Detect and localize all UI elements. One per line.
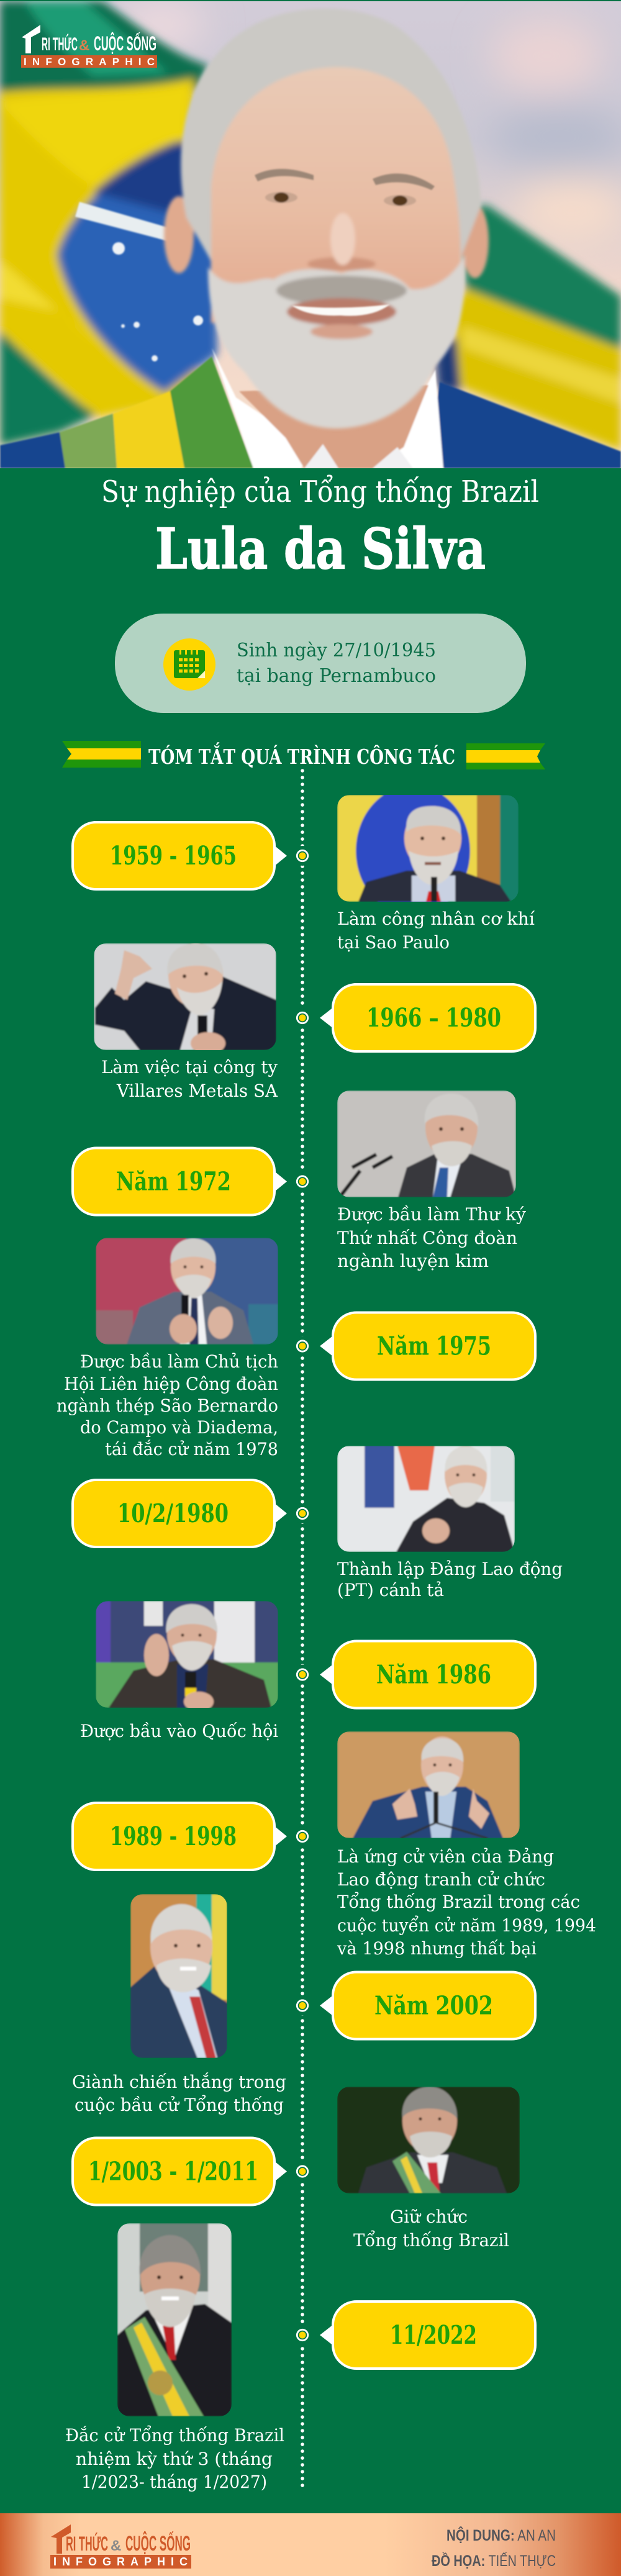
- item 1989-1998: date pill: 1989 - 1998: [110, 1821, 237, 1851]
- caption 10: Đắc cử Tổng thống Brazil: [65, 2425, 284, 2446]
- caption 7: Lao động tranh cử chức: [337, 1869, 545, 1890]
- caption 8: [72, 2072, 286, 2115]
- caption 1: tại Sao Paulo: [337, 932, 450, 953]
- caption 3: Thứ nhất Công đoàn: [337, 1228, 517, 1248]
- credits: ĐỒ HỌA: TIẾN THỰC: [432, 2551, 556, 2570]
- section heading: TÓM TẮT QUÁ TRÌNH CÔNG TÁC: [148, 742, 455, 769]
- birth text: Sinh ngày 27/10/1945: [237, 640, 436, 661]
- caption 9: Giữ chức: [390, 2206, 468, 2227]
- caption 1: [337, 909, 535, 953]
- item 10/2/1980: date pill: [73, 1480, 312, 1547]
- photo 6: [96, 1601, 278, 1712]
- item 11/2022: date pill: [292, 2302, 535, 2369]
- main title: Lula da Silva: [155, 516, 486, 582]
- item 1989-1998: date pill: [73, 1803, 312, 1870]
- caption 1: Làm công nhân cơ khí: [337, 909, 535, 929]
- caption 3: [337, 1204, 526, 1271]
- footer logo: CUỘC SỐNG: [125, 2531, 191, 2556]
- footer logo: &: [111, 2537, 121, 2554]
- caption 4: tái đắc cử năm 1978: [105, 1439, 278, 1459]
- caption 10: [65, 2425, 284, 2492]
- icon: calendar: [163, 638, 215, 691]
- photo 3: [337, 1091, 516, 1197]
- caption 8: cuộc bầu cử Tổng thống: [75, 2095, 284, 2115]
- caption 7: cuộc tuyển cử năm 1989, 1994: [337, 1915, 596, 1936]
- caption 5: [337, 1559, 563, 1600]
- hero logo: CUỘC SỐNG: [94, 32, 156, 55]
- caption 4: [57, 1351, 278, 1459]
- caption 3: Được bầu làm Thư ký: [337, 1204, 526, 1225]
- item 2003-2011: date pill: [73, 2138, 312, 2205]
- item 1959-1965: date pill: [73, 822, 312, 889]
- item 11/2022: date pill: 11/2022: [390, 2320, 477, 2350]
- timeline dotted line: [301, 771, 304, 2488]
- photo 9: [337, 2087, 520, 2193]
- hero logo: &: [79, 37, 89, 54]
- caption 8: Giành chiến thắng trong: [72, 2072, 286, 2092]
- caption 4: Được bầu làm Chủ tịch: [80, 1351, 278, 1372]
- birth text: [237, 640, 436, 687]
- flag stars: [112, 242, 203, 361]
- photo 7: [337, 1731, 520, 1838]
- photo 8: [130, 1894, 227, 2058]
- item 2002: date pill: Năm 2002: [374, 1991, 493, 2021]
- hero logo: [21, 25, 157, 68]
- footer logo: [50, 2524, 191, 2569]
- hero portrait with Brazilian flag: [0, 0, 621, 468]
- caption 7: [337, 1846, 596, 1959]
- item 1972: date pill: [73, 1148, 312, 1215]
- left ribbon: [62, 741, 141, 768]
- item 2002: date pill: [292, 1972, 535, 2039]
- caption 3: ngành luyện kim: [337, 1251, 489, 1271]
- caption 9: [353, 2206, 509, 2251]
- caption 10: 1/2023- tháng 1/2027): [81, 2472, 267, 2492]
- item 10/2/1980: date pill: 10/2/1980: [117, 1499, 229, 1528]
- item 1966-1980: date pill: 1966 – 1980: [366, 1003, 501, 1033]
- photo 2: [94, 943, 276, 1054]
- item 2003-2011: date pill: 1/2003 - 1/2011: [88, 2156, 258, 2186]
- caption 2: Villares Metals SA: [116, 1081, 278, 1101]
- item 1959-1965: date pill: 1959 - 1965: [110, 841, 237, 871]
- photo 4: [96, 1238, 278, 1345]
- subtitle: Sự nghiệp của Tổng thống Brazil: [101, 474, 539, 509]
- birth text: tại bang Pernambuco: [237, 665, 436, 687]
- birth info pill: [115, 614, 526, 713]
- hero logo: RI THỨC: [42, 34, 78, 55]
- item 1975: date pill: [292, 1313, 535, 1380]
- credits: [432, 2526, 556, 2570]
- photo 5: [337, 1446, 515, 1552]
- item 1975: date pill: Năm 1975: [377, 1331, 491, 1361]
- item 1966-1980: date pill: [292, 984, 535, 1051]
- caption 7: và 1998 nhưng thất bại: [337, 1938, 537, 1959]
- caption 4: ngành thép São Bernardo: [57, 1395, 278, 1416]
- section heading: [62, 741, 545, 769]
- caption 7: Tổng thống Brazil trong các: [337, 1892, 580, 1912]
- caption 5: Thành lập Đảng Lao động: [337, 1559, 563, 1579]
- caption 2: Làm việc tại công ty: [101, 1057, 278, 1077]
- photo 10: [117, 2223, 232, 2416]
- caption 6: Được bầu vào Quốc hội: [80, 1721, 278, 1741]
- photo 1: [337, 795, 519, 902]
- footer logo: RI THỨC: [66, 2533, 108, 2555]
- item 1986: date pill: [292, 1641, 535, 1708]
- caption 10: nhiệm kỳ thứ 3 (tháng: [76, 2449, 273, 2469]
- footer logo: INFOGRAPHIC: [53, 2556, 188, 2568]
- caption 4: Hội Liên hiệp Công đoàn: [64, 1374, 278, 1394]
- hero logo: INFOGRAPHIC: [24, 56, 155, 68]
- caption 4: do Campo và Diadema,: [80, 1417, 278, 1438]
- item 1972: date pill: Năm 1972: [116, 1166, 231, 1196]
- right ribbon: [466, 743, 545, 769]
- item 1986: date pill: Năm 1986: [376, 1659, 491, 1689]
- caption 2: [101, 1057, 278, 1101]
- caption 9: Tổng thống Brazil: [353, 2230, 509, 2251]
- credits: NỘI DUNG: AN AN: [446, 2526, 556, 2544]
- caption 5: (PT) cánh tả: [337, 1580, 444, 1600]
- footer: [0, 2513, 621, 2576]
- caption 7: Là ứng cử viên của Đảng: [337, 1846, 554, 1867]
